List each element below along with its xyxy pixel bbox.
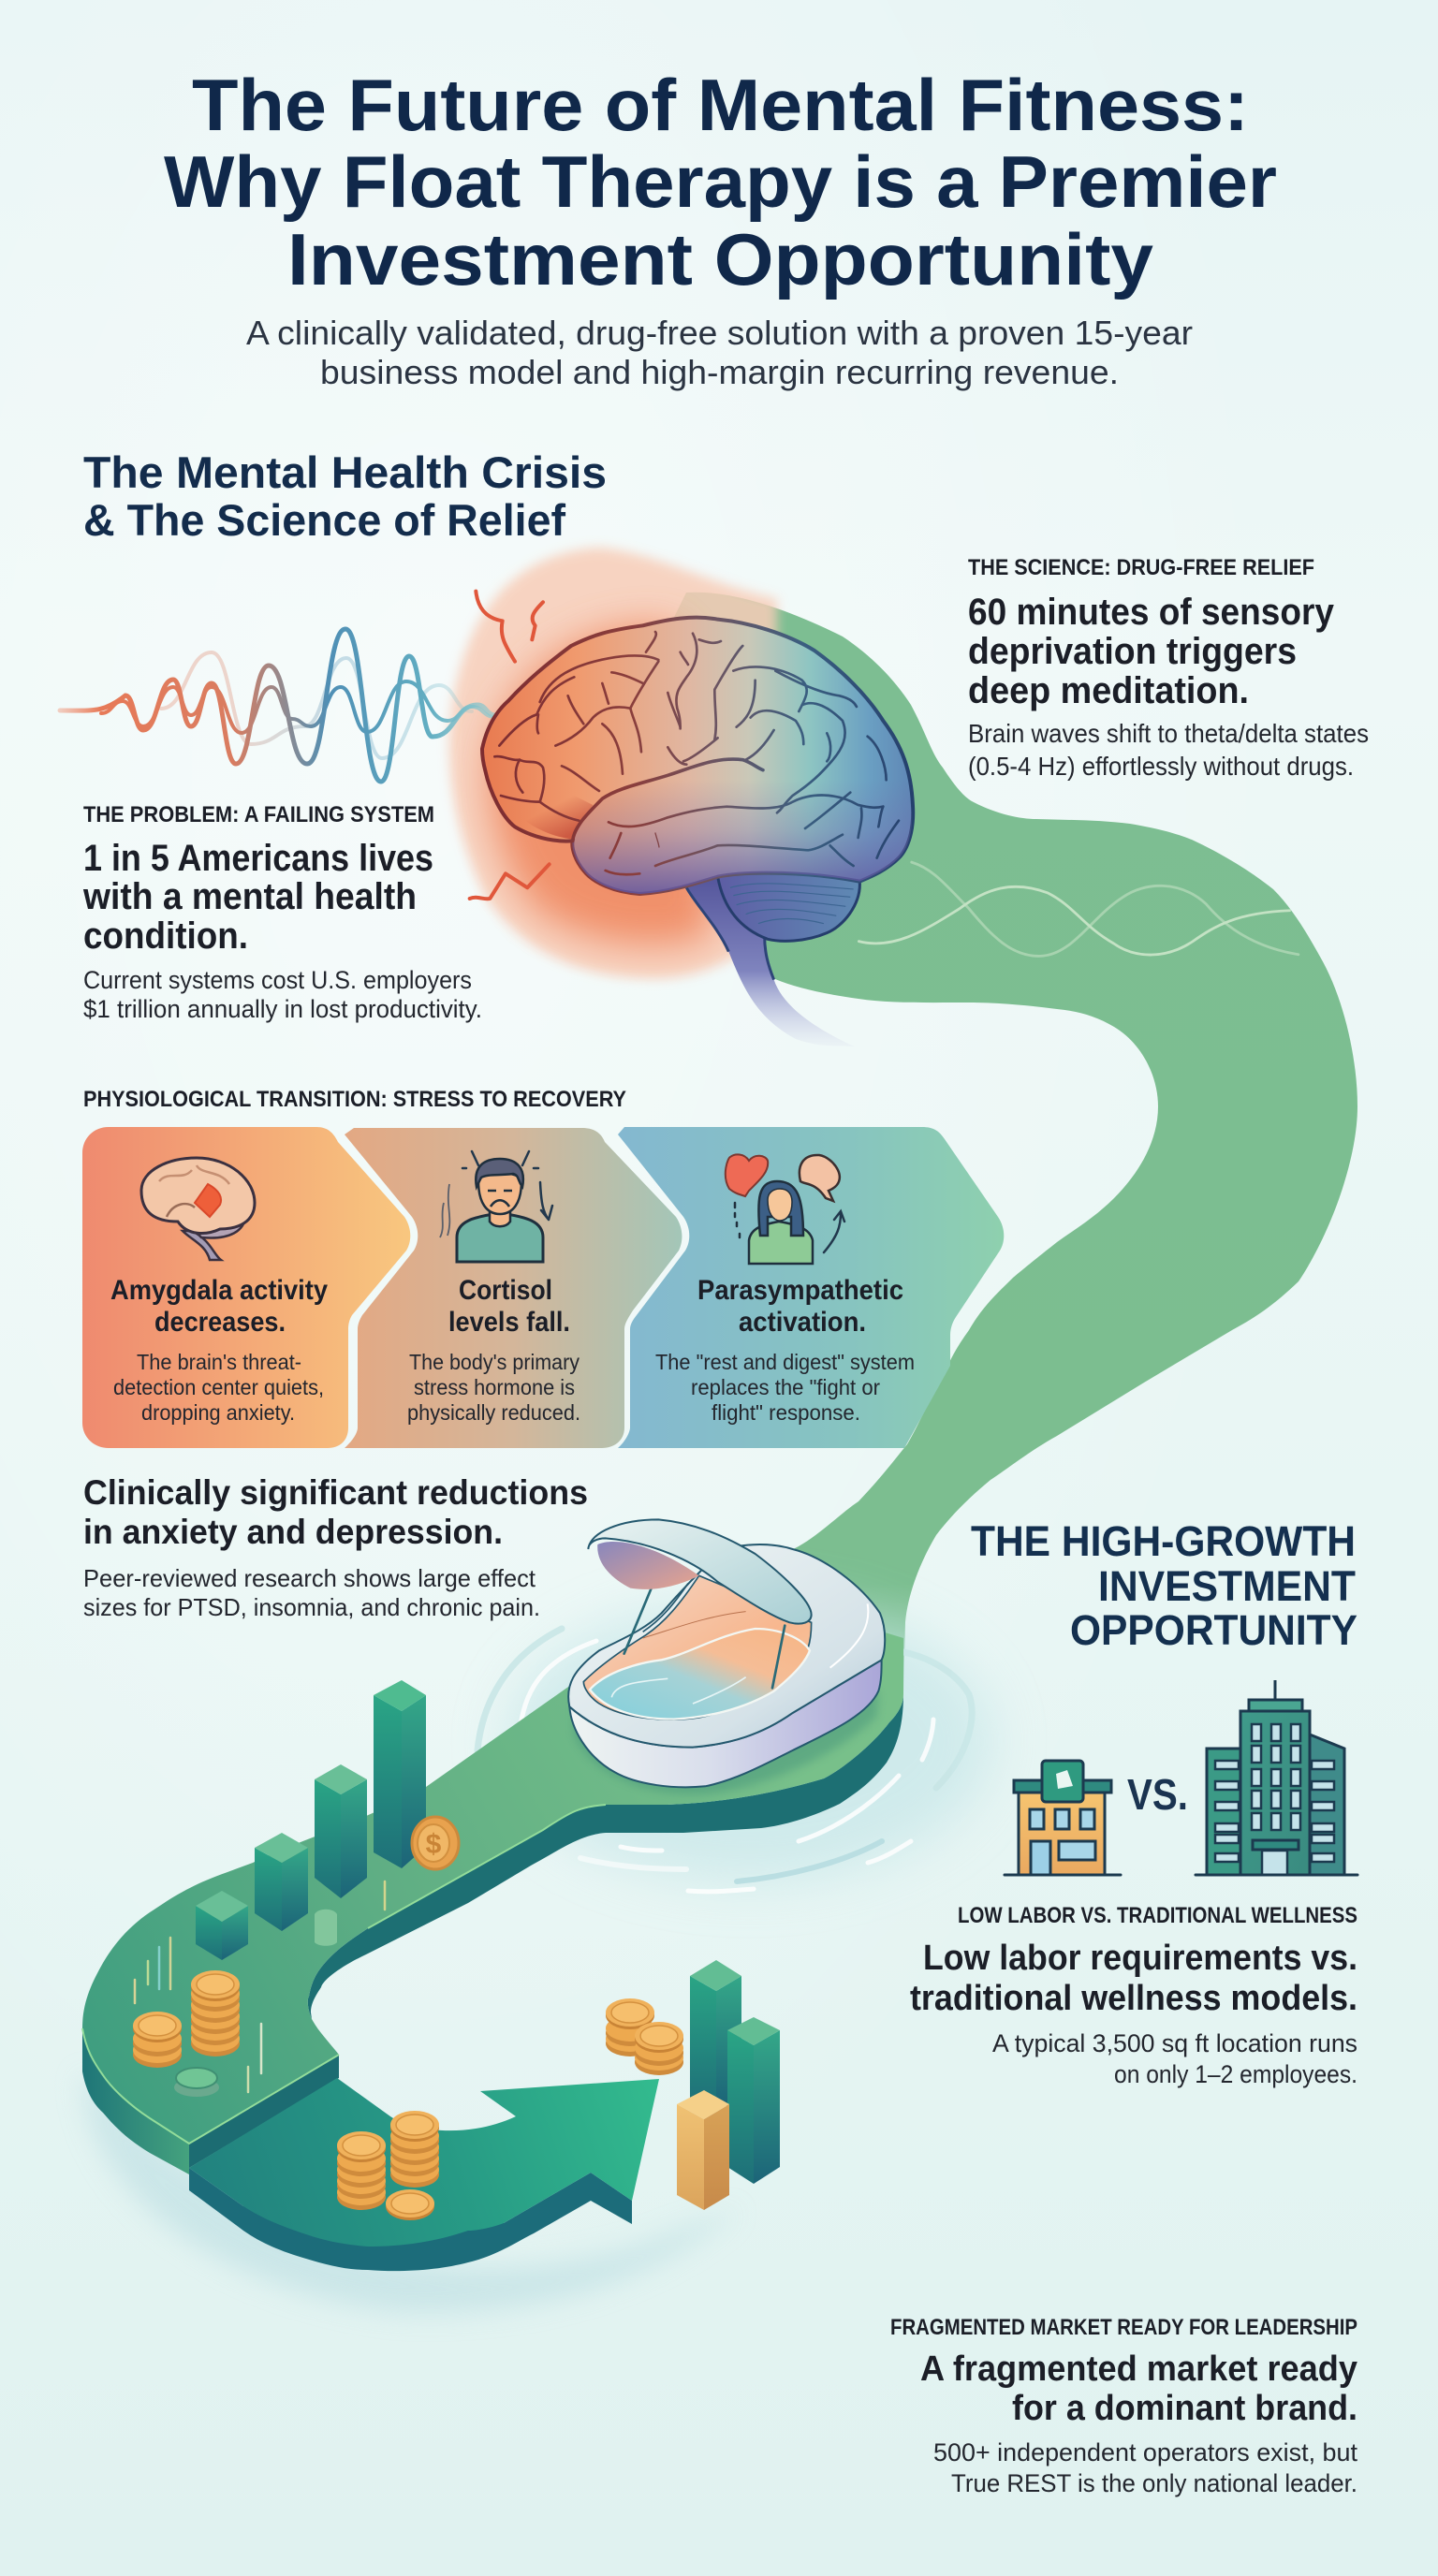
text block: the problem: condition. bbox=[83, 915, 248, 957]
text block: the science: deprivation triggers bbox=[968, 631, 1297, 672]
text block: clinical results: Clinically significant reductions bbox=[83, 1473, 588, 1512]
text block: low labor: traditional wellness models. bbox=[910, 1979, 1357, 2018]
text block: fragmented market: FRAGMENTED MARKET READY FOR LEADERSHIP bbox=[890, 2315, 1357, 2340]
text block: low labor: LOW LABOR VS. TRADITIONAL WELLNESS bbox=[958, 1903, 1357, 1928]
sparks on path bbox=[135, 1881, 385, 2092]
faint cylinder marker bbox=[315, 1910, 337, 1946]
text block: fragmented market: True REST is the only national leader. bbox=[951, 2469, 1357, 2497]
panel: parasympathetic chevron bbox=[618, 1127, 1004, 1448]
EEG brain waves bbox=[60, 629, 495, 782]
label: vs: VS. bbox=[1127, 1770, 1188, 1819]
panel: amygdala chevron bbox=[82, 1127, 410, 1448]
panel: cortisol chevron: levels fall. bbox=[448, 1307, 570, 1338]
panel: cortisol chevron: The body's primary bbox=[409, 1350, 580, 1374]
icon: large wellness tower bbox=[1196, 1680, 1357, 1875]
text block: the science: deep meditation. bbox=[968, 670, 1249, 711]
growth arrow bbox=[189, 2078, 659, 2247]
text block: low labor bbox=[910, 1903, 1357, 2088]
cerebrum bbox=[482, 618, 913, 894]
text block: the problem bbox=[82, 802, 482, 1023]
coin stacks on path bbox=[133, 1970, 439, 2220]
icon: small float centre bbox=[1005, 1761, 1121, 1875]
text block: the science: (0.5-4 Hz) effortlessly without drugs. bbox=[968, 752, 1354, 781]
panel: cortisol chevron bbox=[345, 1128, 682, 1448]
brain illustration bbox=[470, 592, 913, 1046]
panel: amygdala chevron: Amygdala activity bbox=[110, 1275, 328, 1306]
text block: the problem: 1 in 5 Americans lives bbox=[83, 838, 433, 879]
label: physiological transition: PHYSIOLOGICAL TRANSITION: STRESS TO RECOVERY bbox=[83, 1087, 626, 1112]
text block: low labor: Low labor requirements vs. bbox=[923, 1939, 1357, 1978]
heading: investment opportunity: OPPORTUNITY bbox=[1070, 1606, 1357, 1654]
bar chart: destination bars bbox=[677, 1960, 780, 2210]
text block: fragmented market bbox=[890, 2315, 1357, 2497]
shadow under growth path bbox=[82, 2071, 740, 2313]
text block: low labor: A typical 3,500 sq ft location runs bbox=[992, 2029, 1357, 2057]
title bbox=[164, 64, 1277, 300]
title: The Future of Mental Fitness: bbox=[192, 64, 1249, 146]
panel: parasympathetic chevron: activation. bbox=[739, 1307, 866, 1338]
heading: investment opportunity bbox=[971, 1517, 1357, 1654]
text block: fragmented market: 500+ independent operators exist, but bbox=[933, 2438, 1357, 2466]
text block: the problem: THE PROBLEM: A FAILING SYSTEM bbox=[83, 802, 434, 827]
green flowing ribbon bbox=[655, 593, 1357, 1694]
panel: amygdala chevron: The brain's threat- bbox=[137, 1350, 301, 1374]
growth path platform bbox=[82, 1591, 903, 2271]
subtitle: business model and high-margin recurring revenue. bbox=[320, 353, 1119, 391]
panel: cortisol chevron: physically reduced. bbox=[407, 1400, 580, 1425]
text block: clinical results: in anxiety and depression. bbox=[83, 1513, 503, 1551]
panel: cortisol chevron: Cortisol bbox=[459, 1275, 552, 1306]
icon: dollar coin: $ bbox=[426, 1829, 442, 1860]
subtitle bbox=[246, 314, 1193, 391]
icon: stressed person bbox=[440, 1151, 552, 1262]
title: Why Float Therapy is a Premier bbox=[164, 140, 1277, 223]
text block: the science bbox=[968, 555, 1369, 781]
text block: the problem: $1 trillion annually in lost productivity. bbox=[83, 995, 482, 1023]
title: Investment Opportunity bbox=[287, 218, 1153, 300]
text block: clinical results: Peer-reviewed research shows large effect bbox=[83, 1564, 536, 1592]
text block: the science: Brain waves shift to theta/delta states bbox=[968, 719, 1369, 748]
icon: dollar coin bbox=[412, 1817, 459, 1869]
panel: amygdala chevron: decreases. bbox=[154, 1307, 286, 1338]
heading: investment opportunity: THE HIGH-GROWTH bbox=[971, 1517, 1356, 1565]
bar chart: rising bars on path bbox=[196, 1680, 426, 1960]
text block: the science: 60 minutes of sensory bbox=[968, 592, 1335, 633]
text block: fragmented market: A fragmented market ready bbox=[920, 2349, 1357, 2389]
subtitle: A clinically validated, drug-free solution with a proven 15-year bbox=[246, 314, 1193, 352]
panel: parasympathetic chevron: Parasympathetic bbox=[697, 1275, 903, 1306]
water ripples around pod bbox=[477, 1601, 992, 1892]
panel: parasympathetic chevron: The "rest and digest" system bbox=[655, 1350, 915, 1374]
icon: calm person with heart and brain bbox=[726, 1154, 844, 1264]
brain stem bbox=[686, 878, 855, 1046]
text block: clinical results: sizes for PTSD, insomnia, and chronic pain. bbox=[83, 1593, 540, 1621]
icon: brain with amygdala bbox=[141, 1158, 255, 1260]
coin stacks near arrow bbox=[606, 1998, 683, 2075]
brain folds bbox=[494, 632, 899, 874]
text block: clinical results bbox=[83, 1473, 588, 1621]
cerebellum bbox=[718, 873, 859, 941]
text block: fragmented market: for a dominant brand. bbox=[1012, 2389, 1357, 2428]
panel: parasympathetic chevron: replaces the "fight or bbox=[691, 1375, 880, 1399]
stress bolts bbox=[470, 592, 550, 899]
panel: amygdala chevron: dropping anxiety. bbox=[141, 1400, 295, 1425]
stress glow behind brain bbox=[449, 548, 777, 978]
section heading: crisis and relief: & The Science of Relief bbox=[83, 495, 565, 545]
text block: the problem: with a mental health bbox=[82, 876, 417, 917]
text block: the science: THE SCIENCE: DRUG-FREE RELIEF bbox=[968, 555, 1314, 580]
text block: low labor: on only 1–2 employees. bbox=[1114, 2060, 1357, 2088]
section heading: crisis and relief: The Mental Health Crisis bbox=[83, 447, 607, 497]
text block: the problem: Current systems cost U.S. employers bbox=[83, 966, 472, 994]
panel: parasympathetic chevron: flight" response. bbox=[712, 1400, 860, 1425]
calm wave on ribbon bbox=[858, 862, 1299, 956]
heading: investment opportunity: INVESTMENT bbox=[1098, 1562, 1356, 1610]
float pod bbox=[568, 1519, 885, 1794]
panel: amygdala chevron: detection center quiets, bbox=[113, 1375, 324, 1399]
section heading: crisis and relief bbox=[83, 447, 607, 545]
icon: green tokens bbox=[174, 2068, 219, 2097]
panel: cortisol chevron: stress hormone is bbox=[414, 1375, 575, 1399]
